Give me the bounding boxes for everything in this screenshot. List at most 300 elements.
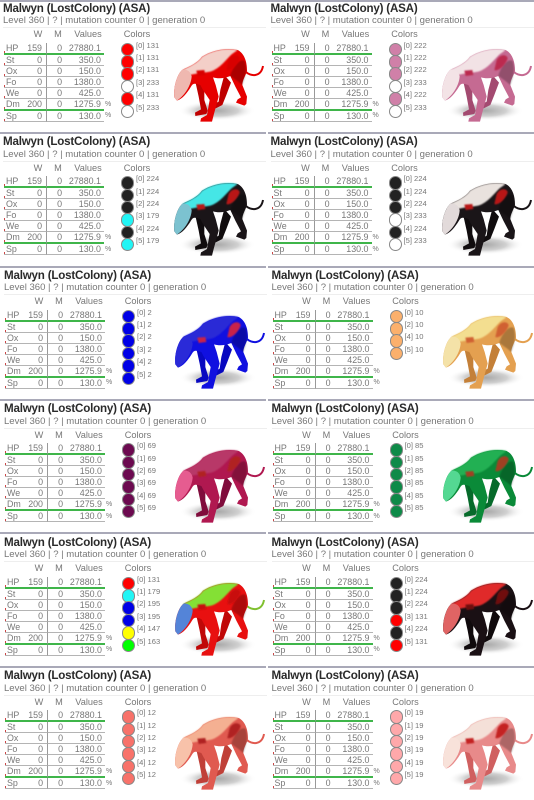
stats table: % [105, 246, 111, 252]
stats table: 0 [306, 354, 310, 364]
stats table: 425.0 [80, 755, 102, 765]
color swatches: [3] 233 [136, 78, 159, 87]
color swatches [390, 441, 424, 518]
stats table: 0 [326, 511, 330, 521]
stats table: 1380.0 [75, 477, 102, 487]
stats table: 0 [306, 722, 310, 732]
stats table: Fo [7, 610, 17, 620]
stats table: 27880.1 [70, 443, 102, 453]
stats table: 0 [58, 766, 63, 776]
title: Malwyn (LostColony) (ASA) [272, 669, 418, 682]
stats table: % [374, 501, 380, 508]
color swatches: [0] 12 [137, 708, 156, 717]
stats table: 0 [58, 378, 63, 388]
stats table: 0 [325, 54, 330, 64]
column headers [268, 696, 428, 708]
stats table: 0 [38, 378, 43, 388]
color swatches: [1] 19 [404, 721, 424, 730]
stats table: 0 [326, 443, 330, 453]
stats table: 0 [38, 344, 43, 354]
color swatches: [2] 19 [404, 733, 424, 742]
column headers [34, 162, 150, 172]
stats table: 130.0 [80, 511, 102, 521]
level line: Level 360 | ? | mutation counter 0 | generation 0 [272, 282, 474, 293]
stats table: Dm [7, 766, 21, 776]
color swatches: [1] 2 [137, 320, 152, 329]
stats table [272, 42, 379, 122]
stats table: 0 [37, 54, 42, 64]
stats table: 0 [306, 755, 310, 765]
stats table: 0 [38, 477, 43, 487]
column headers [268, 563, 428, 574]
column headers: M [322, 29, 329, 39]
color swatches: [3] 195 [137, 612, 160, 621]
stats table: 27880.1 [70, 710, 102, 720]
column headers: M [323, 563, 330, 573]
stats table [5, 576, 114, 656]
stats table: 0 [326, 744, 330, 754]
stats table: 1380.0 [74, 76, 101, 86]
stats table: 0 [325, 66, 330, 76]
color swatches: [3] 85 [404, 478, 424, 487]
stats table: 0 [58, 344, 63, 354]
color swatches: [5] 179 [136, 236, 159, 245]
stats table: 150.0 [346, 66, 368, 76]
stats table: Fo [7, 344, 17, 354]
stats table: 0 [57, 199, 62, 209]
stats table: 150.0 [347, 600, 370, 610]
color swatches: [2] 222 [404, 65, 427, 74]
stats table: Fo [274, 610, 285, 620]
stats table [272, 710, 382, 789]
stats table: 1275.9 [74, 98, 101, 108]
stats table: 425.0 [80, 354, 102, 364]
stats table: 0 [326, 733, 330, 743]
stats table: St [7, 455, 15, 465]
stats table: 200 [295, 232, 310, 242]
stats table: 159 [296, 310, 310, 320]
stats table: 1275.9 [75, 499, 102, 509]
stats table: 425.0 [347, 755, 370, 765]
stats table: St [274, 54, 282, 64]
stats table: 1380.0 [342, 610, 370, 620]
stats table: St [7, 588, 15, 598]
stats table: 350.0 [346, 188, 368, 198]
stats table: 0 [326, 499, 330, 509]
stats table: 0 [326, 588, 330, 598]
color swatches: [1] 224 [404, 187, 427, 196]
stats table [4, 176, 111, 255]
column headers: Colors [124, 29, 150, 39]
stats table: Fo [7, 477, 17, 487]
color swatches: [3] 233 [404, 78, 427, 87]
column headers: M [323, 430, 330, 440]
column headers: M [322, 162, 329, 172]
level line [4, 282, 267, 295]
stats table: 0 [37, 244, 42, 254]
stats table: Sp [7, 644, 18, 654]
stats table: Ox [7, 600, 18, 610]
stats table: Sp [274, 644, 285, 654]
stats table: Dm [7, 366, 21, 376]
stats table: Dm [274, 98, 287, 108]
stats table: 130.0 [346, 244, 368, 254]
stats table: We [274, 354, 288, 364]
stats table: 27880.1 [337, 443, 370, 453]
stats table: 0 [57, 232, 62, 242]
stats table: 159 [296, 443, 310, 453]
stats table: 1275.9 [74, 232, 101, 242]
stats table: 0 [325, 199, 330, 209]
level line: Level 360 | ? | mutation counter 0 | generation 0 [270, 148, 473, 160]
level line: Level 360 | ? | mutation counter 0 | generation 0 [4, 282, 206, 293]
stats table: St [274, 722, 283, 732]
color swatches: [1] 12 [137, 721, 156, 730]
stats table: 0 [58, 332, 63, 342]
color swatches: [3] 2 [137, 345, 152, 354]
title: Malwyn (LostColony) (ASA) [4, 268, 151, 282]
stats table: % [374, 368, 380, 374]
stats table: Dm [6, 98, 20, 108]
stats table: 0 [58, 310, 63, 320]
stats table: 130.0 [80, 644, 102, 654]
stats table: 0 [57, 54, 62, 64]
stats table: 0 [326, 488, 330, 498]
color swatches: [1] 69 [137, 454, 156, 463]
icon: creature render [174, 48, 264, 122]
icon: creature render [443, 315, 533, 389]
stats table: 350.0 [80, 455, 102, 465]
column headers: M [55, 430, 63, 440]
stats table: Fo [274, 76, 284, 86]
column headers: M [55, 696, 63, 706]
stats table: HP [274, 710, 287, 720]
stats table: Ox [6, 199, 17, 209]
color swatches: [4] 222 [404, 90, 427, 99]
stats table: 27880.1 [337, 710, 370, 720]
stats table: St [274, 588, 283, 598]
color swatches: [0] 131 [137, 575, 160, 584]
color swatches: [1] 131 [136, 53, 159, 62]
column headers: M [55, 296, 63, 306]
stats table [273, 443, 380, 522]
stats table: 0 [325, 232, 330, 242]
stats table: 159 [296, 576, 310, 586]
stats table: 0 [306, 744, 310, 754]
stats table: 0 [57, 76, 62, 86]
color swatches: [5] 2 [137, 370, 152, 379]
stats table: 0 [325, 110, 330, 120]
stats table: 200 [28, 632, 43, 642]
stats table: % [374, 634, 380, 642]
column headers [34, 430, 151, 440]
color swatches: [5] 19 [404, 770, 424, 779]
stats table: 159 [28, 710, 43, 720]
stats table: 0 [305, 210, 310, 220]
icon: creature render [168, 708, 268, 792]
color swatches: [0] 85 [404, 441, 424, 450]
stats table: 0 [306, 778, 310, 788]
stats table: % [106, 768, 112, 775]
title: Malwyn (LostColony) (ASA) [4, 402, 151, 415]
stats table: 0 [306, 622, 310, 632]
stats table [5, 443, 112, 522]
stats table: 0 [58, 455, 63, 465]
stats table: 0 [58, 778, 63, 788]
column headers [34, 296, 151, 306]
stats table: 350.0 [79, 54, 101, 64]
column headers [1, 563, 161, 574]
stats table: 0 [58, 744, 63, 754]
column headers: Colors [391, 162, 418, 172]
stats table: 1380.0 [342, 477, 370, 487]
stats table: 0 [326, 332, 330, 342]
stats table: 425.0 [347, 488, 370, 498]
stats table: 1275.9 [75, 632, 102, 642]
stats table: 0 [325, 76, 330, 86]
stats table: 130.0 [347, 378, 370, 388]
stats table: 0 [326, 600, 330, 610]
stats table: Dm [274, 232, 287, 242]
stats table: 425.0 [346, 88, 368, 98]
stats table: 200 [296, 366, 310, 376]
color swatches: [0] 69 [137, 441, 156, 450]
stats table: Sp [274, 511, 285, 521]
icon: creature render [436, 708, 534, 792]
column headers: Colors [125, 563, 151, 573]
stats table: 0 [57, 42, 62, 52]
column headers: Values [343, 696, 370, 706]
color swatches: [2] 195 [137, 599, 160, 608]
stats table: 0 [58, 632, 63, 642]
stats table: 159 [28, 576, 43, 586]
stats table: We [7, 622, 20, 632]
color swatches: [2] 131 [136, 65, 159, 74]
column headers [302, 296, 419, 306]
stats table: 0 [58, 644, 63, 654]
stats table: 350.0 [80, 322, 102, 332]
stats table: St [6, 54, 14, 64]
stats table: Dm [274, 632, 288, 642]
title: Malwyn (LostColony) (ASA) [4, 536, 151, 548]
color swatches: [0] 224 [404, 174, 427, 183]
stats table: 0 [58, 366, 63, 376]
column headers: W [35, 563, 43, 573]
stats table: HP [6, 176, 18, 186]
stats table [272, 176, 379, 255]
stats table: 0 [306, 378, 310, 388]
stats table: 0 [57, 176, 62, 186]
stats table: 0 [306, 322, 310, 332]
stats table: 0 [38, 511, 43, 521]
stats table: St [7, 322, 15, 332]
panel: orange creature card [272, 268, 534, 389]
stats table: 0 [58, 710, 63, 720]
stats table: HP [274, 176, 286, 186]
level line [3, 148, 266, 162]
stats table: 0 [37, 110, 42, 120]
stats table: 1275.9 [342, 632, 370, 642]
stats table: % [106, 368, 112, 374]
stats table: % [105, 112, 111, 119]
stats table: 425.0 [346, 221, 368, 231]
column headers: Colors [124, 162, 150, 172]
color swatches: [2] 69 [137, 466, 156, 475]
column headers: W [34, 29, 42, 39]
column headers: Colors [392, 696, 419, 706]
panel: green creature card [272, 402, 534, 523]
column headers [302, 430, 419, 440]
level line [272, 549, 534, 562]
stats table: HP [274, 42, 286, 52]
stats table: 27880.1 [69, 42, 101, 52]
stats table: 0 [58, 755, 63, 765]
column headers: W [35, 296, 43, 306]
panel: multicolor creature card [1, 534, 267, 667]
stats table: 0 [37, 66, 42, 76]
stats table: Ox [274, 66, 285, 76]
column headers: Colors [125, 430, 151, 440]
stats table: We [274, 755, 288, 765]
level line [272, 682, 534, 696]
stats table: 0 [305, 221, 310, 231]
stats table: 130.0 [347, 644, 370, 654]
stats table: 425.0 [347, 622, 370, 632]
title: Malwyn (LostColony) (ASA) [272, 402, 418, 415]
color swatches: [4] 19 [404, 758, 424, 767]
stats table: Fo [274, 477, 285, 487]
stats table: 0 [58, 477, 63, 487]
color swatches: [3] 131 [404, 612, 428, 621]
column headers: Values [75, 563, 103, 573]
panel: magenta creature card [4, 402, 267, 523]
column headers: W [35, 696, 43, 706]
panel: cyan and black creature card [3, 135, 266, 256]
level line [3, 15, 266, 28]
stats table: 0 [325, 88, 330, 98]
stats table: 0 [37, 88, 42, 98]
stats table: 27880.1 [337, 576, 370, 586]
color swatches: [2] 224 [404, 199, 427, 208]
stats table: % [374, 379, 380, 386]
stats table: 0 [305, 54, 310, 64]
stats table: 425.0 [79, 221, 101, 231]
color swatches: [4] 69 [137, 491, 156, 500]
stats table: 0 [326, 778, 330, 788]
stats table: % [374, 768, 380, 775]
color swatches: [1] 179 [137, 587, 160, 596]
color swatches: [2] 12 [137, 733, 156, 742]
stats table: St [274, 188, 282, 198]
column headers: Values [343, 296, 370, 306]
level line: Level 360 | ? | mutation counter 0 | generation 0 [3, 148, 205, 160]
stats table: % [374, 780, 380, 786]
stats table: 425.0 [347, 354, 370, 364]
color swatches: [5] 85 [404, 503, 424, 512]
color swatches: [5] 163 [137, 637, 160, 646]
icon: creature render [175, 314, 265, 389]
column headers [1, 696, 161, 708]
stats table: 0 [38, 722, 43, 732]
stats table: Ox [274, 600, 286, 610]
stats table: 0 [57, 244, 62, 254]
stats table: HP [7, 576, 19, 586]
stats table: 200 [28, 366, 43, 376]
stats table: Sp [274, 110, 284, 120]
stats table: 150.0 [80, 600, 102, 610]
stats table [5, 710, 114, 789]
color swatches: [1] 222 [404, 53, 427, 62]
color swatches: [4] 131 [136, 90, 159, 99]
stats table: Sp [7, 778, 18, 788]
column headers: M [323, 696, 330, 706]
stats table: 350.0 [347, 322, 370, 332]
column headers: Colors [392, 430, 419, 440]
stats table: HP [274, 310, 287, 320]
panel: pink creature card [270, 2, 534, 122]
column headers: Values [74, 29, 102, 39]
stats table: 27880.1 [337, 310, 370, 320]
stats table: 0 [37, 76, 42, 86]
stats table: 1380.0 [75, 744, 102, 754]
stats table: Dm [7, 632, 21, 642]
stats table: 0 [306, 644, 310, 654]
stats table: 0 [306, 488, 310, 498]
column headers: W [302, 696, 311, 706]
stats table: 0 [38, 744, 43, 754]
stats table: 130.0 [80, 778, 102, 788]
stats table: 200 [28, 766, 43, 776]
column headers [34, 29, 150, 39]
stats table: 0 [306, 610, 310, 620]
color swatches: [0] 19 [404, 708, 424, 717]
icon: creature render [442, 48, 532, 122]
stats table: 0 [325, 42, 330, 52]
icon: creature render [443, 448, 533, 523]
color swatches: [5] 233 [404, 236, 427, 245]
stats table: 350.0 [79, 188, 101, 198]
stats table: 0 [37, 210, 42, 220]
stats table: % [105, 100, 111, 108]
panel: blue creature card [4, 268, 267, 389]
stats table: 27880.1 [70, 310, 102, 320]
stats table: 0 [305, 110, 310, 120]
stats table: 0 [305, 188, 310, 198]
stats table: 0 [306, 466, 310, 476]
title: Malwyn (LostColony) (ASA) [270, 2, 418, 14]
level line: Level 360 | ? | mutation counter 0 | generation 0 [4, 416, 206, 426]
stats table: 0 [37, 199, 42, 209]
stats table: 27880.1 [336, 176, 368, 186]
stats table: Dm [6, 232, 20, 242]
stats table: 200 [28, 499, 43, 509]
stats table: 0 [326, 722, 330, 732]
stats table: 0 [57, 88, 62, 98]
stats table: 0 [325, 210, 330, 220]
icon: creature render [174, 182, 264, 256]
stats table: 0 [326, 576, 330, 586]
stats table: 0 [58, 466, 63, 476]
stats table: 150.0 [79, 66, 101, 76]
stats table: 0 [326, 632, 330, 642]
stats table: 130.0 [346, 110, 368, 120]
title: Malwyn (LostColony) (ASA) [4, 669, 151, 682]
stats table: 1380.0 [75, 344, 102, 354]
stats table: 0 [38, 332, 43, 342]
level line [4, 416, 267, 428]
stats table [4, 42, 111, 122]
color swatches: [1] 224 [404, 587, 428, 596]
